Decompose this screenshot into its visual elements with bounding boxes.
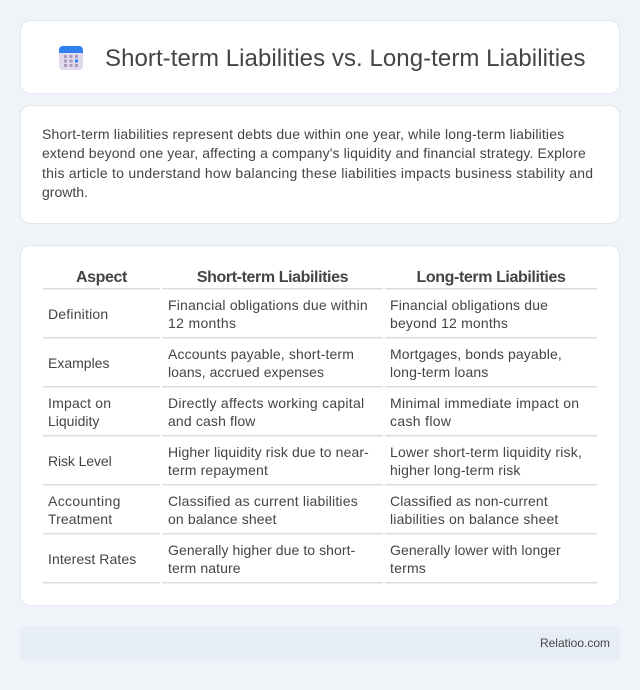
row: examples: long-term loans <box>390 364 488 380</box>
table panel <box>20 245 620 606</box>
row: accounting treatment: liabilities on balance sheet <box>390 511 558 527</box>
row: accounting treatment: Treatment <box>48 511 112 527</box>
row: risk level: higher long-term risk <box>390 462 521 478</box>
table header: Long-term Liabilities <box>417 269 565 286</box>
row: impact on liquidity: cash flow <box>390 413 451 429</box>
row: definition: Financial obligations due within <box>168 297 368 313</box>
row: definition: Financial obligations due <box>390 297 548 313</box>
row: definition: Definition <box>48 306 108 322</box>
row: impact on liquidity: Directly affects working capital <box>168 395 364 411</box>
row: examples: Examples <box>48 355 109 371</box>
title: Short-term Liabilities vs. Long-term Liabilities <box>105 45 586 72</box>
intro text: extend beyond one year, affecting a company's liquidity and financial strategy. Explore <box>42 145 586 161</box>
row: interest rates: term nature <box>168 560 241 576</box>
row: accounting treatment: on balance sheet <box>168 511 277 527</box>
row: interest rates: Interest Rates <box>48 551 136 567</box>
row: risk level: Lower short-term liquidity risk, <box>390 444 582 460</box>
intro text: this article to understand how balancing these liabilities impacts business stability and <box>42 165 593 181</box>
row: definition: 12 months <box>168 315 236 331</box>
table header: Aspect <box>76 269 127 286</box>
footer credit: Relatioo.com <box>540 636 610 650</box>
footer bar <box>20 626 620 660</box>
row: definition: beyond 12 months <box>390 315 508 331</box>
row: examples: Mortgages, bonds payable, <box>390 346 562 362</box>
intro text: Short-term liabilities represent debts due within one year, while long-term liabilities <box>42 126 564 142</box>
row: examples: loans, accrued expenses <box>168 364 324 380</box>
intro panel <box>20 105 620 224</box>
row: impact on liquidity: Minimal immediate impact on <box>390 395 579 411</box>
row: interest rates: terms <box>390 560 426 576</box>
intro text: growth. <box>42 184 88 200</box>
intro text <box>42 126 593 200</box>
row: risk level: Risk Level <box>48 453 112 469</box>
icon: calendar <box>59 46 83 70</box>
row: impact on liquidity: and cash flow <box>168 413 256 429</box>
row: impact on liquidity: Liquidity <box>48 413 99 429</box>
row: risk level: Higher liquidity risk due to near- <box>168 444 369 460</box>
title panel <box>20 20 620 94</box>
row: accounting treatment: Classified as non-current <box>390 493 548 509</box>
row: accounting treatment: Classified as current liabilities <box>168 493 358 509</box>
row: accounting treatment: Accounting <box>48 493 121 509</box>
row: interest rates: Generally higher due to short- <box>168 542 355 558</box>
row: risk level: term repayment <box>168 462 268 478</box>
row: impact on liquidity: Impact on <box>48 395 111 411</box>
table header: Short-term Liabilities <box>197 269 348 286</box>
row: interest rates: Generally lower with longer <box>390 542 561 558</box>
row: examples: Accounts payable, short-term <box>168 346 354 362</box>
